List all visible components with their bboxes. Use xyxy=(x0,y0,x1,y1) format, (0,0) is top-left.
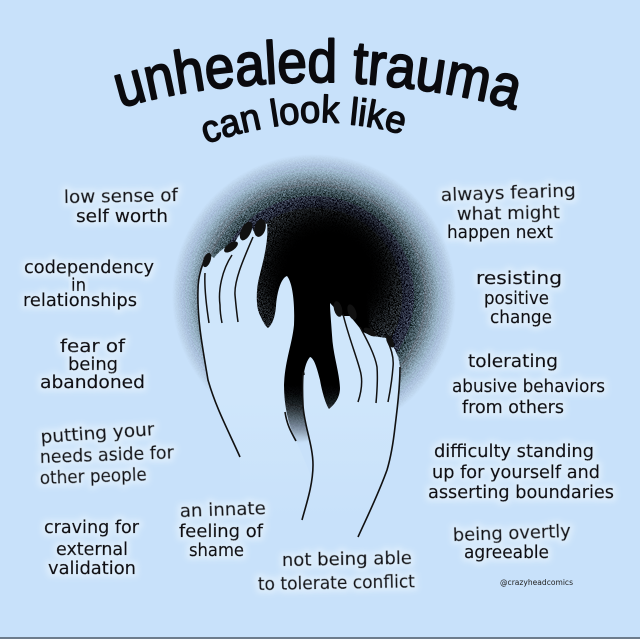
right text: resisting positive change: resisting xyxy=(476,268,562,289)
right text: tolerating abusive behaviors xyxy=(452,351,605,418)
right hand xyxy=(300,300,400,570)
left text: putting your needs aside: needs aside for xyxy=(39,442,175,468)
spray darkness xyxy=(172,154,456,438)
right text: difficulty standing xyxy=(428,441,614,503)
right text: always fearing: what might xyxy=(457,202,560,225)
left text: codependency in relationships: in xyxy=(71,275,86,296)
left text: craving for external validation: craving for xyxy=(44,517,140,538)
left text: fear of being abandoned xyxy=(40,336,145,393)
center text: not being able to tolerate conflict xyxy=(258,548,415,595)
right text: difficulty standing: asserting boundaries xyxy=(428,482,614,503)
title: can look like xyxy=(202,94,405,142)
center text: an innate feeling of shame xyxy=(179,498,266,561)
right text: always fearing xyxy=(440,180,576,243)
left text: fear of being abandoned: abandoned xyxy=(40,372,145,393)
center text: an innate feeling of shame: shame xyxy=(189,540,244,561)
left text: putting your needs aside: putting your xyxy=(40,419,156,448)
left text: codependency in relationships: codependency xyxy=(24,257,154,278)
center text: an innate feeling of shame: an innate xyxy=(179,498,266,522)
right text: resisting positive change: positive xyxy=(484,288,549,309)
left text: codependency in relationships: relationships xyxy=(23,290,137,311)
left text: craving for external validation: validation xyxy=(48,558,136,579)
right text: resisting positive change: change xyxy=(490,307,552,328)
center text: an innate feeling of shame: feeling of xyxy=(179,521,264,542)
credit: @crazyheadcomics xyxy=(500,578,573,587)
right text: being overtly agreeable xyxy=(452,521,571,563)
right text: resisting positive change xyxy=(476,268,562,328)
title: unhealed trauma xyxy=(114,38,518,110)
right text: tolerating abusive behaviors: from others xyxy=(462,397,564,418)
right text: tolerating abusive behaviors: abusive behaviors xyxy=(452,376,605,397)
right text: tolerating abusive behaviors: tolerating xyxy=(468,351,558,372)
left text: low sense of self worth: low sense of xyxy=(64,185,179,208)
left text: putting your needs aside xyxy=(39,419,175,489)
left text: craving for external validation xyxy=(44,517,140,579)
left text: putting your needs aside: other people xyxy=(39,464,147,489)
right text: being overtly agreeable: being overtly xyxy=(452,521,571,546)
right text: always fearing: happen next xyxy=(447,222,553,243)
left hand xyxy=(198,218,330,540)
left text: low sense of self worth xyxy=(64,185,179,227)
right text: difficulty standing: up for yourself and xyxy=(432,462,600,483)
center text: not being able to tolerate conflict: to tolerate conflict xyxy=(258,571,415,595)
left text: fear of being abandoned: being xyxy=(68,354,118,375)
left text: craving for external validation: external xyxy=(56,539,128,560)
center text: not being able to tolerate conflict: not being able xyxy=(282,548,412,571)
left text: codependency in relationships xyxy=(23,257,154,311)
illustration: black spray and hands xyxy=(172,154,456,570)
right text: difficulty standing: difficulty standing xyxy=(434,441,594,462)
left text: low sense of self worth: self worth xyxy=(76,206,168,227)
right text: being overtly agreeable: agreeable xyxy=(464,542,549,563)
left text: fear of being abandoned: fear of xyxy=(60,336,126,357)
right text: always fearing: always fearing xyxy=(440,180,576,206)
